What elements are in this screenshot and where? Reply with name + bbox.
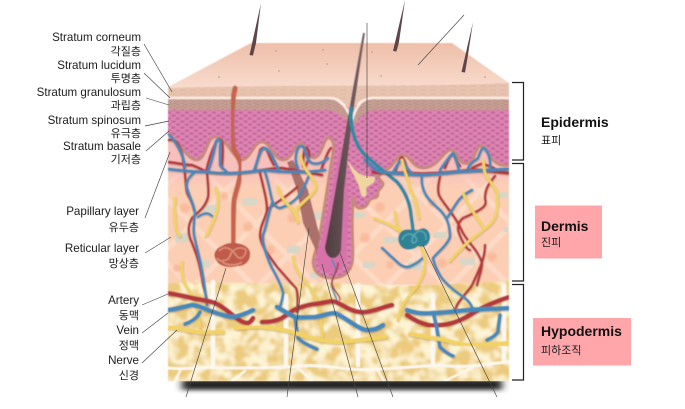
label: Artery: Artery (108, 294, 139, 307)
surface pores (218, 49, 486, 78)
dermal arteries (168, 139, 508, 312)
hypodermis veins (168, 305, 509, 356)
hypodermis nerves (168, 327, 509, 345)
label: Papillary layer: Papillary layer (66, 205, 139, 218)
bracket: epidermis (512, 82, 524, 160)
sebaceous gland (346, 158, 375, 197)
label: Artery: 동맥 (119, 309, 139, 322)
label: Reticular layer (65, 242, 139, 270)
label: Stratum spinosum (48, 114, 141, 140)
dermis spots (173, 192, 497, 272)
dermal veins (168, 135, 508, 310)
hair shaft (325, 33, 365, 258)
label: Vein: 정맥 (119, 339, 139, 352)
label: Stratum lucidum (57, 59, 141, 85)
stratum lucidum (168, 98, 509, 120)
stratum spinosum and basale (168, 105, 509, 278)
surface hairs (250, 0, 473, 72)
dermis background (168, 135, 509, 285)
skin block illustration (168, 33, 509, 381)
teal sweat gland coil (398, 228, 430, 250)
label: Stratum basale: Stratum basale (63, 140, 141, 153)
callout: Hypodermis: 피하조직 (541, 343, 581, 357)
callout: Dermis: 진피 (541, 236, 561, 249)
stratum granulosum (168, 99, 509, 128)
label: Vein: Vein (116, 324, 139, 337)
stratum corneum (168, 83, 509, 116)
label: Stratum spinosum: 유극층 (111, 127, 141, 140)
follicle papilla vessels (332, 260, 340, 301)
callout: Dermis: Dermis (541, 218, 589, 234)
bracket: dermis (512, 164, 524, 281)
basal layer edge (168, 133, 509, 278)
heading: Epidermis (541, 114, 609, 147)
dermal nerves (175, 155, 497, 337)
epidermis layers (168, 83, 509, 278)
hypodermis fat (168, 281, 509, 381)
heading: Epidermis: Epidermis (541, 114, 609, 130)
label: Nerve (108, 354, 139, 382)
hair follicle inner sheath (317, 150, 349, 273)
label: Reticular layer: Reticular layer (65, 242, 139, 255)
upper dermis pink band (168, 135, 509, 189)
label: Vein (116, 324, 139, 352)
label: Stratum corneum: Stratum corneum (52, 31, 141, 44)
callout: Dermis (535, 206, 602, 258)
red sweat gland coil (214, 243, 250, 267)
shadow under skin block (182, 379, 502, 390)
label: Stratum basale: 기저층 (111, 153, 141, 166)
label: Stratum granulosum: Stratum granulosum (37, 86, 141, 99)
hypodermis arteries (168, 293, 509, 325)
label: Nerve: 신경 (119, 369, 139, 382)
bracket: hypodermis (512, 284, 524, 380)
label: Stratum basale (63, 140, 141, 166)
leader lines (142, 15, 497, 397)
label: Papillary layer: 유두층 (109, 221, 139, 234)
label: Stratum spinosum: Stratum spinosum (48, 114, 141, 127)
erector muscle (287, 160, 320, 253)
label: Reticular layer: 망상층 (109, 257, 139, 270)
connective tissue patches (175, 192, 508, 278)
label: Stratum granulosum (37, 86, 141, 112)
callout: Hypodermis (533, 318, 631, 366)
label: Stratum corneum: 각질층 (111, 45, 141, 58)
label: Stratum lucidum: Stratum lucidum (57, 59, 141, 72)
heading: Epidermis: 표피 (541, 134, 561, 147)
fat septa (168, 282, 509, 381)
callout: Hypodermis: Hypodermis (541, 323, 622, 339)
skin surface top face (168, 43, 509, 90)
label: Nerve: Nerve (108, 354, 139, 367)
label: Stratum granulosum: 과립층 (111, 99, 141, 112)
label: Stratum lucidum: 투명층 (111, 72, 141, 85)
label: Stratum corneum (52, 31, 141, 58)
label: Artery (108, 294, 139, 322)
red sweat duct (232, 88, 241, 245)
teal sweat duct (351, 108, 413, 231)
label: Papillary layer (66, 205, 139, 234)
